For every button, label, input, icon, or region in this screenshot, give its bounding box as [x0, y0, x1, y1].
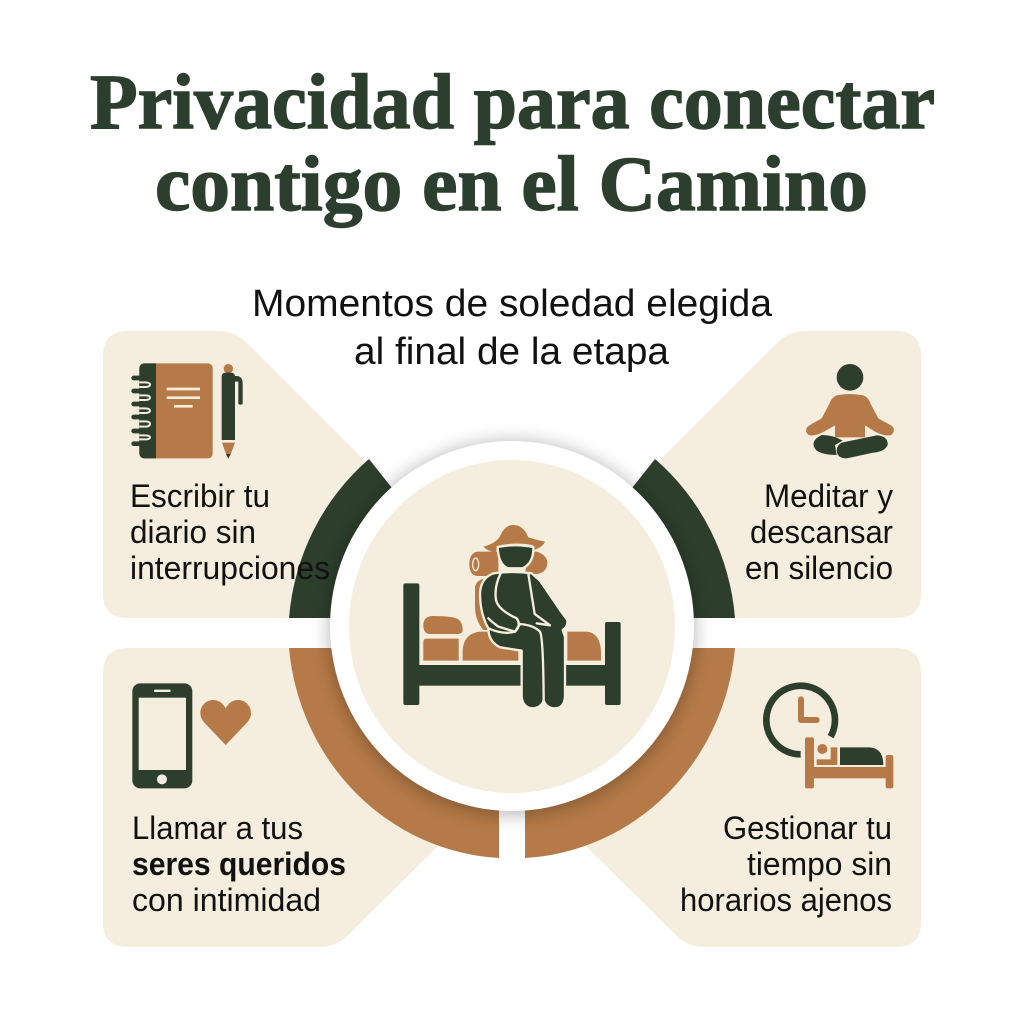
text: gestionar: tiempo sin [747, 846, 892, 882]
text: gestionar [680, 810, 892, 918]
center circle [329, 441, 695, 815]
text: llamar [132, 810, 346, 918]
notebook [134, 363, 213, 458]
hiker body [480, 545, 567, 708]
text: llamar: Llamar a tus [132, 810, 303, 846]
text: meditar: en silencio [745, 550, 893, 586]
text: escribir: Escribir tu [130, 478, 270, 514]
text: gestionar: horarios ajenos [680, 882, 892, 918]
title [90, 58, 935, 227]
title: contigo en el Camino [155, 140, 868, 227]
text: escribir [130, 478, 330, 586]
bed frame [403, 583, 621, 705]
panel: escribir [103, 331, 392, 618]
clock [766, 686, 835, 754]
bedding [423, 616, 601, 661]
subtitle [252, 283, 773, 373]
ring segment: top left [289, 459, 392, 618]
hat and backpack [469, 525, 547, 630]
icon: clock and bed [766, 686, 893, 788]
title: Privacidad para conectar [90, 58, 935, 145]
panel: gestionar [524, 648, 921, 947]
icon: phone and heart [132, 683, 251, 788]
text: gestionar: Gestionar tu [723, 810, 892, 846]
ring segment: bottom right [525, 648, 735, 858]
pen [222, 364, 243, 459]
icon: hiker sitting on bed [403, 525, 621, 708]
text: meditar [745, 478, 893, 586]
subtitle: al final de la etapa [354, 331, 670, 373]
icon: meditating person [806, 364, 894, 458]
text: llamar: seres queridos [132, 846, 346, 882]
blanket [840, 747, 883, 765]
ring segment: top right [632, 459, 735, 618]
phone [132, 683, 192, 788]
small bed [805, 737, 893, 788]
heart [200, 700, 251, 745]
text: escribir: diario sin [130, 514, 256, 550]
panel: meditar [632, 331, 921, 618]
subtitle: Momentos de soledad elegida [252, 283, 773, 325]
panel: llamar [103, 648, 500, 947]
ring segment: bottom left [289, 648, 499, 858]
text: meditar: descansar [750, 514, 893, 550]
icon: notebook and pen [134, 363, 243, 459]
text: meditar: Meditar y [764, 478, 893, 514]
text: escribir: interrupciones [130, 550, 330, 586]
text: llamar: con intimidad [132, 882, 321, 918]
